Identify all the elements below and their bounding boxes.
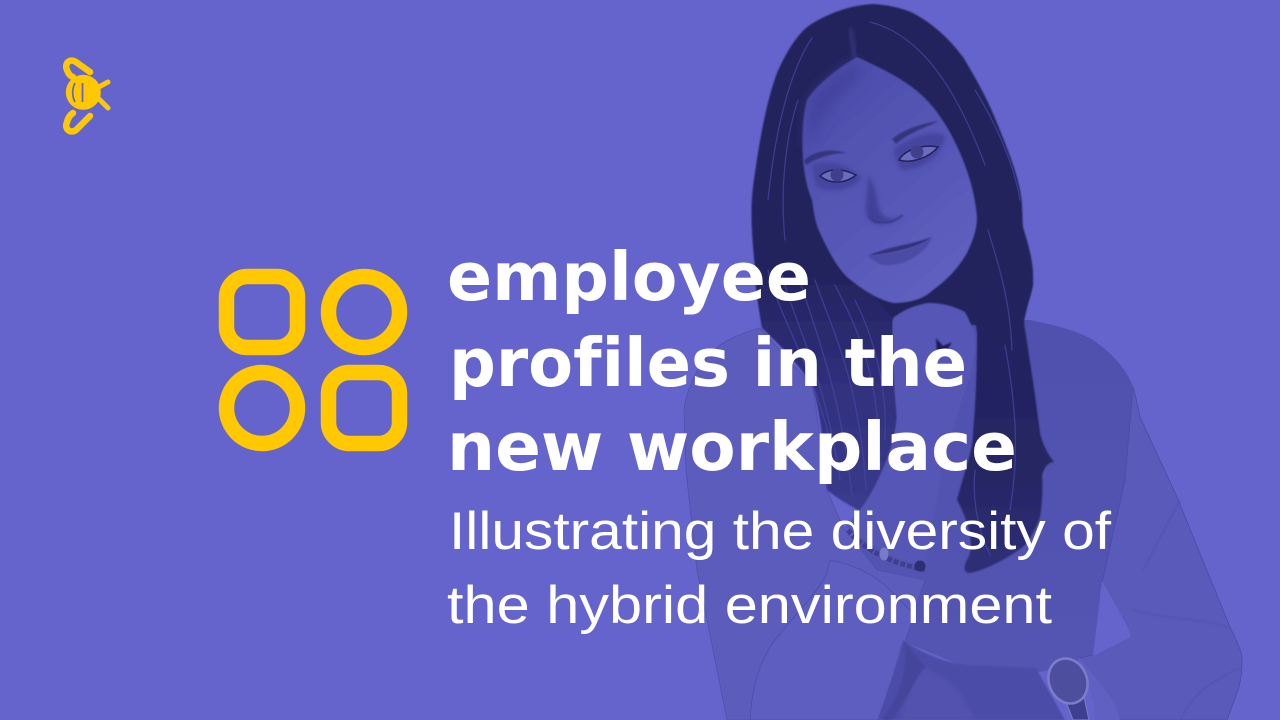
hair back and crown <box>752 4 1033 325</box>
watch <box>1042 653 1094 720</box>
title: employee <box>447 238 811 316</box>
right arm sleeve <box>1080 387 1242 720</box>
icon: four app shapes <box>226 276 400 444</box>
bracelet charm <box>880 548 888 560</box>
knuckles <box>900 668 975 720</box>
right lower hair <box>957 250 1054 573</box>
bee upper wing <box>66 61 90 77</box>
title <box>447 238 1017 486</box>
bee antennae <box>97 82 108 108</box>
left arm sleeve <box>684 328 925 720</box>
subtitle <box>447 502 1111 635</box>
right iris <box>910 146 924 158</box>
hair strands <box>768 22 1020 555</box>
bee stripes <box>73 83 82 102</box>
sleeve creases <box>1133 500 1240 720</box>
left eye <box>820 170 856 182</box>
subtitle: the hybrid environment <box>447 576 1052 635</box>
shirt cuff at the watch <box>1073 658 1120 720</box>
upper lip <box>868 237 932 256</box>
nose shadow <box>866 175 904 224</box>
nostril line <box>869 215 903 223</box>
eye socket shading <box>812 133 945 191</box>
watch strap <box>1062 692 1089 720</box>
title: profiles in the <box>449 324 967 402</box>
torso <box>850 320 1133 672</box>
watch face <box>1042 653 1094 709</box>
bracelet <box>848 530 926 572</box>
bee body <box>66 75 101 110</box>
lower forearm and hand <box>878 640 1065 720</box>
facial features <box>804 60 945 265</box>
logo: yellow bee <box>66 61 108 131</box>
left sleeve crease and lighter cuff <box>750 560 916 720</box>
dark gap between hand and sleeve <box>882 642 925 720</box>
lower lip <box>868 238 932 265</box>
finger shadow <box>936 338 952 355</box>
left lower hair <box>755 265 897 515</box>
face <box>802 57 977 303</box>
title: new workplace <box>447 408 1017 486</box>
eyebrows <box>804 121 939 165</box>
subtitle: Illustrating the diversity of <box>449 502 1111 561</box>
face side shading <box>806 60 862 150</box>
photo: woman with duotone treatment <box>684 4 1242 720</box>
right eye <box>899 146 938 161</box>
background gap under right arm <box>1093 581 1131 656</box>
hand under chin <box>845 303 975 568</box>
bracelet stones <box>914 560 926 572</box>
hair parting highlight <box>850 28 855 58</box>
bee lower wing <box>66 113 90 131</box>
bracelet chain <box>848 530 925 570</box>
left iris <box>830 168 844 182</box>
